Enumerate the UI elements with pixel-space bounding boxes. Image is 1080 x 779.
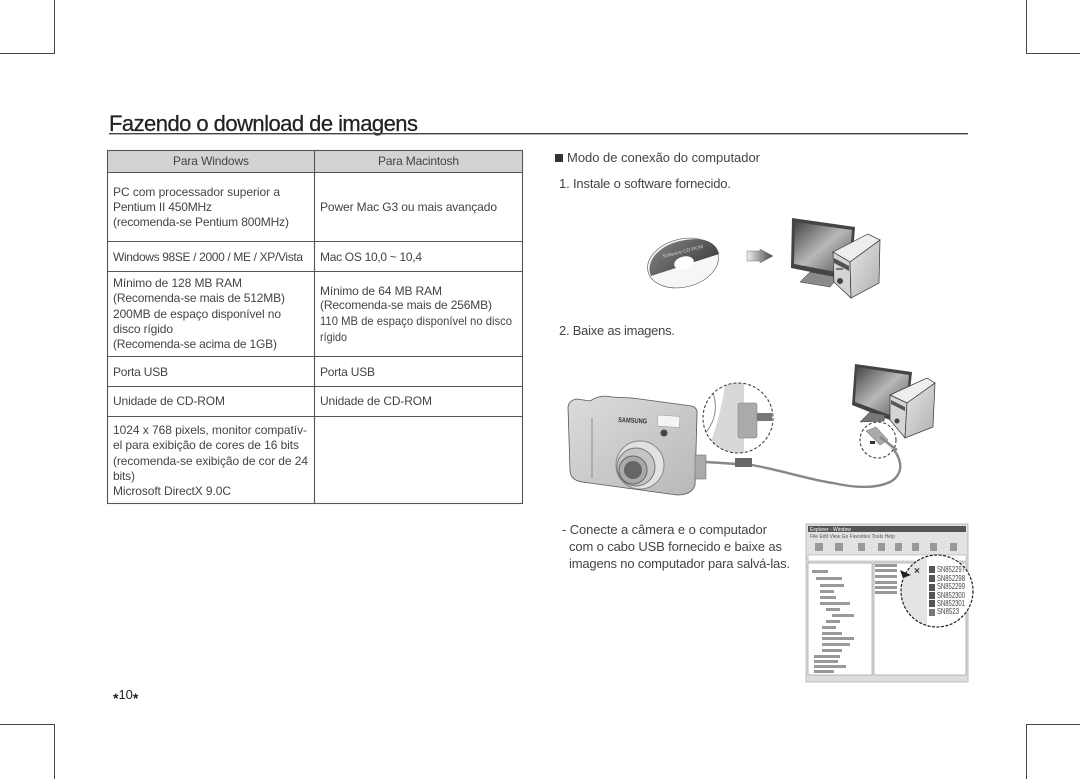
camera body: SAMSUNG	[618, 417, 648, 426]
column: Para Windows: Para Windows	[173, 154, 249, 168]
column: Para Windows: Unidade de CD-ROM	[113, 394, 225, 408]
column: Para Macintosh: Mínimo de 64 MB RAM	[320, 284, 442, 298]
icon: computer	[791, 218, 880, 298]
column: Para Macintosh: (Recomenda-se mais de 256MB)	[320, 298, 492, 312]
USB port detail circle	[703, 380, 773, 456]
magnified file list: SN8523	[937, 606, 959, 616]
page number: *	[133, 690, 139, 706]
column: Para Macintosh: 110 MB de espaço disponível no disco	[320, 314, 512, 328]
magnified file list: SN852297	[937, 564, 965, 574]
screenshot: explorer window: File Edit View Go Favorites Tools Help	[810, 534, 895, 540]
instructions text	[562, 522, 790, 571]
column: Para Macintosh: Unidade de CD-ROM	[320, 394, 432, 408]
table header band	[108, 150, 522, 172]
magnified file list: ×	[914, 566, 920, 577]
screenshot: explorer window: Explorer - Window	[810, 527, 851, 533]
column: Para Windows: Pentium II 450MHz	[113, 200, 212, 214]
step 1 text: 1. Instale o software fornecido.	[559, 176, 731, 191]
column: Para Macintosh: Power Mac G3 ou mais avançado	[320, 200, 497, 214]
column: Para Windows: Microsoft DirectX 9.0C	[113, 484, 231, 498]
column: Para Windows: bits)	[113, 469, 135, 483]
column: Para Windows: (Recomenda-se mais de 512MB)	[113, 291, 285, 305]
column: Para Macintosh	[320, 154, 512, 408]
column: Para Windows: (recomenda-se exibição de cor de 24	[113, 454, 308, 468]
column: Para Macintosh: Porta USB	[320, 365, 375, 379]
magnified file list: SN852299	[937, 581, 965, 591]
illustration: camera connected to computer	[568, 364, 935, 495]
arrow	[747, 249, 773, 263]
column: Para Windows	[113, 154, 308, 498]
column: Para Windows: 200MB de espaço disponível no	[113, 307, 281, 321]
magnified file list: SN852300	[937, 590, 965, 600]
USB cable	[706, 437, 900, 487]
heading: connection mode: Modo de conexão do computador	[567, 150, 761, 165]
camera body	[568, 396, 706, 495]
page number: *	[113, 690, 119, 706]
column: Para Windows: PC com processador superior a	[113, 185, 280, 199]
column: Para Macintosh: rígido	[320, 330, 347, 344]
column: Para Windows: (Recomenda-se acima de 1GB)	[113, 337, 277, 351]
USB plug detail circle	[860, 422, 896, 458]
instructions text: - Conecte a câmera e o computador	[562, 522, 768, 537]
column: Para Macintosh: Mac OS 10,0 ~ 10,4	[320, 250, 422, 264]
column: Para Windows: el para exibição de cores de 16 bits	[113, 438, 299, 452]
column: Para Windows: Mínimo de 128 MB RAM	[113, 276, 242, 290]
column: Para Windows: disco rígido	[113, 322, 173, 336]
column: Para Windows: (recomenda-se Pentium 800MHz)	[113, 215, 289, 229]
column: Para Macintosh: Para Macintosh	[378, 154, 459, 168]
instructions text: imagens no computador para salvá-las.	[569, 556, 790, 571]
title: Fazendo o download de imagens	[109, 111, 418, 136]
magnified file list: SN852301	[937, 598, 965, 608]
magnified file list	[900, 555, 973, 627]
icon: CD-ROM: Software CD-ROM	[662, 244, 704, 260]
column: Para Windows: Porta USB	[113, 365, 168, 379]
magnified file list: SN852298	[937, 573, 965, 583]
table: system requirements	[108, 150, 522, 504]
column: Para Windows: 1024 x 768 pixels, monitor compatív-	[113, 423, 307, 437]
icon: CD-ROM	[642, 231, 724, 295]
page number: 10	[118, 687, 133, 702]
step 2 text: 2. Baixe as imagens.	[559, 323, 675, 338]
screenshot: explorer window	[806, 524, 973, 682]
instructions text: com o cabo USB fornecido e baixe as	[569, 539, 782, 554]
computer	[852, 364, 935, 438]
column: Para Windows: Windows 98SE / 2000 / ME / XP/Vista	[113, 250, 303, 264]
